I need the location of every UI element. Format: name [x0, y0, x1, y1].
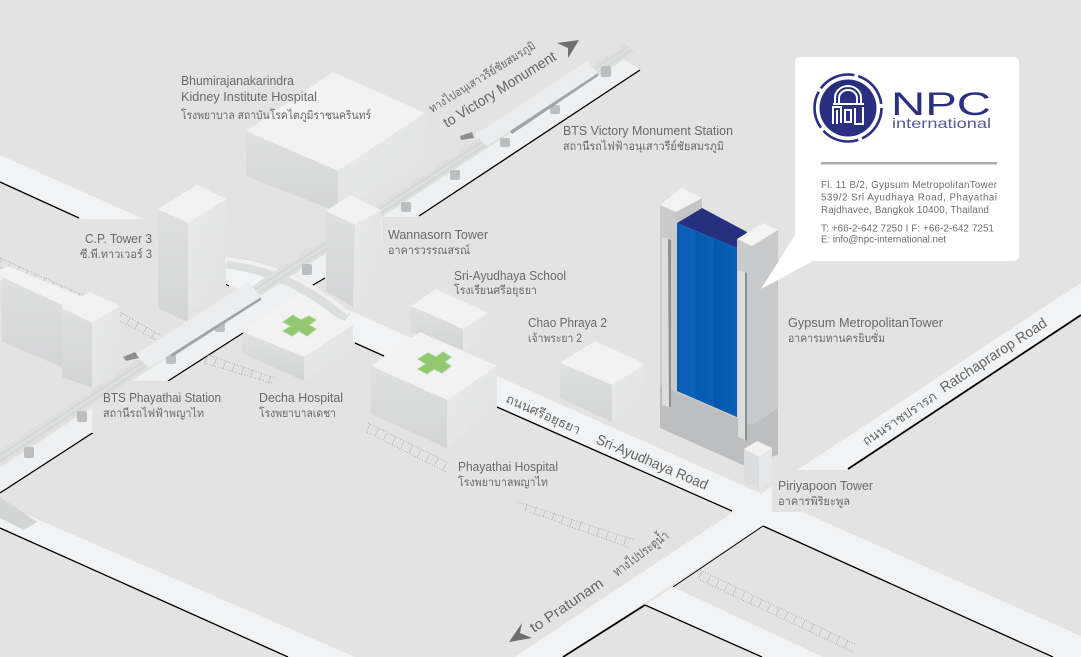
- track pillars: [24, 66, 611, 458]
- blue glass facade: [677, 223, 737, 417]
- direction label: to Victory Monument: ทางไปอนุเสาวรีย์ชัยสมรภูมิ: [426, 38, 538, 116]
- building: Wannasorn Tower: [326, 195, 381, 307]
- road: side branch: [645, 587, 823, 657]
- label: Wannasorn Tower: [388, 228, 488, 257]
- label: Decha Hospital: Decha Hospital: [259, 391, 343, 405]
- label: BTS Victory Monument Station: BTS Victory Monument Station: [563, 124, 733, 138]
- curved ramp road: [227, 259, 349, 318]
- building: long block left: [0, 266, 90, 367]
- address text: Rajdhavee, Bangkok 10400, Thailand: [821, 205, 989, 216]
- left vertical fin: [662, 237, 669, 407]
- label: C.P. Tower 3: ซี.พี.ทาวเวอร์ 3: [80, 247, 152, 261]
- road label: Ratchaprarop Road: [859, 315, 1050, 449]
- label: Sri-Ayudhaya School: [454, 269, 566, 297]
- building: C.P. Tower 3: [158, 185, 226, 322]
- building: Bhumirajanakarindra Kidney Institute Hospital: [246, 72, 427, 212]
- road label: Sri-Ayudhaya Road: ถนนศรีอยุธยา: [503, 391, 583, 438]
- crosswalks: [0, 258, 855, 652]
- label: Phayathai Hospital: Phayathai Hospital: [458, 460, 558, 474]
- address text: [821, 180, 998, 216]
- arrow: to Pratunam: [509, 623, 532, 642]
- building: block left front: [62, 292, 120, 388]
- label: BTS Victory Monument Station: [563, 124, 733, 153]
- label: Piriyapoon Tower: [778, 479, 873, 508]
- label: Wannasorn Tower: อาคารวรรณสรณ์: [388, 243, 470, 257]
- road label: Ratchaprarop Road: ถนนราชปรารภ: [859, 389, 939, 449]
- label: BTS Phayathai Station: [103, 391, 221, 420]
- label: Chao Phraya 2: เจ้าพระยา 2: [528, 332, 582, 345]
- pillar tops: [660, 188, 702, 212]
- building: Phayathai Hospital: [371, 332, 497, 448]
- arrow: to Victory Monument: [557, 40, 579, 58]
- road: Ratchaprarop Road: [515, 283, 1081, 657]
- road label: Sri-Ayudhaya Road: Sri-Ayudhaya Road: [593, 432, 710, 494]
- icon: green cross Phayathai: [418, 352, 451, 374]
- station: BTS Victory Monument: [460, 61, 598, 146]
- building: Piriyapoon Tower: [744, 441, 772, 489]
- label: Bhumirajanakarindra Kidney Institute Hospital: Bhumirajanakarindra: [181, 74, 294, 88]
- glass roof: [677, 208, 747, 248]
- label: Piriyapoon Tower: อาคารพิริยะพูล: [778, 495, 850, 508]
- front pillar strips: [660, 205, 677, 391]
- direction label: to Pratunam: [527, 526, 672, 636]
- address text: 539/2 Sri Ayudhaya Road, Phayathai: [821, 192, 997, 204]
- label: Decha Hospital: [259, 391, 343, 420]
- logo: NPC International: international: [892, 115, 991, 131]
- label: Wannasorn Tower: Wannasorn Tower: [388, 228, 488, 242]
- divider: [821, 162, 997, 164]
- label: Gypsum Metropolitan Tower: อาคารมหานครยิบซั่ม: [788, 330, 885, 345]
- building: Sri-Ayudhaya School: [411, 289, 488, 350]
- building: Gypsum Metropolitan Tower: [660, 188, 778, 465]
- callout: company card: [761, 57, 1019, 289]
- label background masks: [70, 217, 882, 512]
- building: Chao Phraya 2: [560, 341, 645, 422]
- label: Chao Phraya 2: [528, 316, 607, 345]
- contact text: E: info@npc-international.net: [821, 234, 946, 246]
- label: BTS Victory Monument Station: สถานีรถไฟฟ้าอนุเสาวรีย์ชัยสมรภูมิ: [563, 139, 724, 153]
- road label: Sri-Ayudhaya Road: [503, 391, 710, 494]
- label: Phayathai Hospital: โรงพยาบาลพญาไท: [458, 475, 548, 489]
- label: C.P. Tower 3: C.P. Tower 3: [85, 232, 152, 246]
- direction label: to Pratunam: ทางไปประตูน้ำ: [609, 526, 672, 580]
- logo: NPC International: NPC: [891, 86, 991, 122]
- label: Bhumirajanakarindra Kidney Institute Hospital: โรงพยาบาล สถาบันโรคไตภูมิราชนครินทร์: [181, 108, 371, 122]
- label: C.P. Tower 3: [80, 232, 152, 261]
- label: Phayathai Hospital: [458, 460, 558, 489]
- label: BTS Phayathai Station: BTS Phayathai Station: [103, 391, 221, 405]
- road: lower left: [0, 497, 355, 657]
- label: Sri-Ayudhaya School: โรงเรียนศรีอยุธยา: [454, 283, 537, 297]
- direction label: to Pratunam: to Pratunam: [527, 576, 607, 636]
- label: Gypsum Metropolitan Tower: Gypsum MetropolitanTower: [788, 316, 943, 330]
- label: Bhumirajanakarindra Kidney Institute Hospital: Kidney Institute Hospital: [181, 90, 317, 104]
- label: Sri-Ayudhaya School: Sri-Ayudhaya School: [454, 269, 566, 283]
- building: Decha Hospital: [242, 297, 353, 381]
- address text: Fl. 11 B/2, Gypsum MetropolitanTower: [821, 180, 998, 191]
- label: Gypsum Metropolitan Tower: [788, 316, 943, 345]
- label: Chao Phraya 2: Chao Phraya 2: [528, 316, 607, 330]
- icon: green cross Decha: [283, 315, 316, 336]
- direction label: to Victory Monument: to Victory Monument: [441, 49, 559, 131]
- label: Piriyapoon Tower: Piriyapoon Tower: [778, 479, 873, 493]
- label: Bhumirajanakarindra Kidney Institute Hospital: [181, 74, 371, 122]
- right vertical fin: [738, 270, 745, 440]
- road: Sri-Ayudhaya Road: [0, 155, 1081, 657]
- road label: Ratchaprarop Road: Ratchaprarop Road: [937, 315, 1050, 396]
- contact text: [821, 224, 994, 246]
- station: BTS Phayathai: [123, 282, 261, 368]
- label: Decha Hospital: โรงพยาบาลเดชา: [259, 406, 336, 420]
- contact text: T: +66-2-642 7250 I F: +66-2-642 7251: [821, 224, 994, 234]
- label: BTS Phayathai Station: สถานีรถไฟฟ้าพญาไท: [103, 407, 204, 420]
- logo: NPC International: [814, 74, 991, 142]
- BTS elevated track: [0, 44, 635, 465]
- road under BTS line: [0, 58, 640, 493]
